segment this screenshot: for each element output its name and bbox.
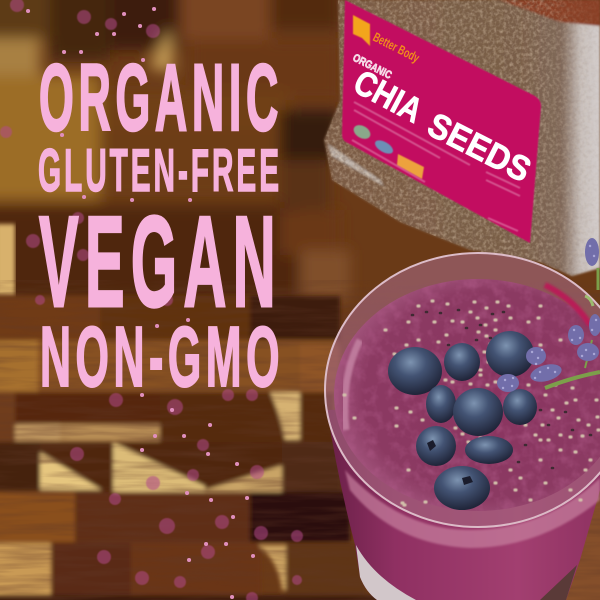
- blueberry 7: [416, 426, 456, 466]
- blueberry 1: [388, 347, 442, 395]
- paint splatter dots: [0, 0, 303, 600]
- dark chia seeds: [412, 310, 591, 468]
- surface mottling: [334, 279, 600, 511]
- brand name: Better Body: [371, 29, 422, 66]
- glass rim: [325, 253, 600, 527]
- smoothie surface: [334, 279, 600, 511]
- small bright dots: [28, 9, 253, 597]
- wood grain texture: [0, 280, 600, 600]
- pale block at left edge: [0, 224, 15, 296]
- text: GLUTEN-FREE: [38, 137, 282, 204]
- brand logo mark: [353, 15, 370, 46]
- glass base: [356, 545, 416, 600]
- blueberries: [388, 331, 537, 510]
- text: VEGAN: [39, 190, 282, 334]
- chia seeds on surface: [344, 301, 599, 505]
- seed grain: [320, 0, 600, 280]
- blueberry 9: [434, 466, 490, 510]
- blueberry 8: [465, 436, 513, 464]
- glass body with smoothie: [327, 400, 600, 600]
- jar of chia seeds: [320, 0, 600, 280]
- blueberry 3: [486, 331, 534, 377]
- lavender sprig: [497, 238, 600, 392]
- pink label: [342, 0, 541, 243]
- label small heading: ORGANIC: [351, 52, 394, 82]
- large translucent dots: [0, 0, 303, 600]
- rim front highlight: [345, 470, 600, 548]
- blueberry 6: [453, 388, 503, 436]
- headline text: [38, 45, 284, 405]
- jar body: [324, 0, 600, 276]
- blueberry calyx marks: [427, 440, 473, 485]
- word: non-gmo: NON-GMO: [40, 310, 284, 405]
- certification badges: [351, 122, 424, 179]
- smoothie glass: [325, 238, 600, 600]
- label title: chia: CHIA: [347, 63, 429, 131]
- lower wood blocks: [0, 296, 600, 600]
- blueberry 5: [503, 389, 537, 425]
- text: ORGANIC: [39, 45, 283, 151]
- blueberry 2: [444, 343, 480, 381]
- upper wood blocks, heavily blurred: [0, 0, 350, 300]
- label fine print: [352, 102, 520, 231]
- label title: seeds: SEEDS: [421, 105, 537, 190]
- blueberry 4: [426, 385, 456, 423]
